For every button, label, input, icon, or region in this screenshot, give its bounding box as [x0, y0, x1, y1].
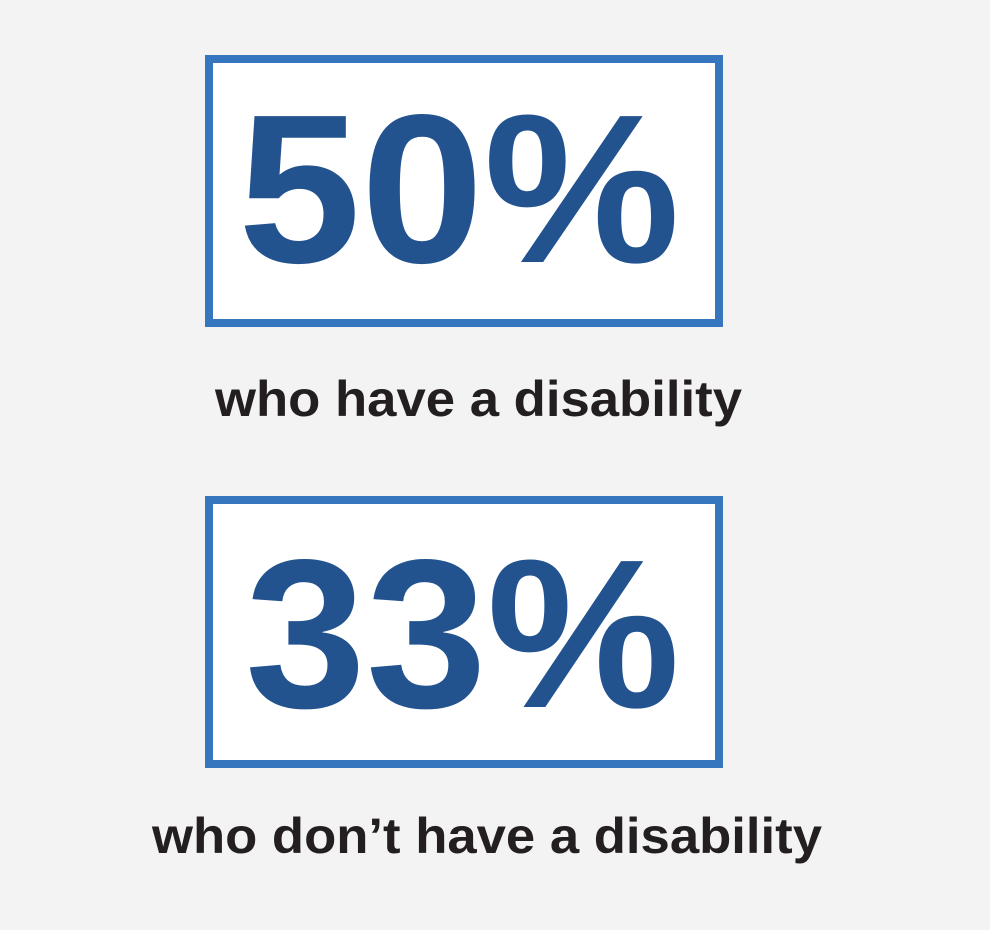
number: 33%: 33%: [245, 515, 680, 752]
stat box: 50%: [209, 59, 719, 323]
stat box: 33%: [209, 500, 719, 764]
label: who don't have a disability: who don’t have a disability: [151, 808, 822, 864]
label: who have a disability: who have a disability: [214, 371, 742, 427]
number: 50%: 50%: [238, 70, 680, 307]
